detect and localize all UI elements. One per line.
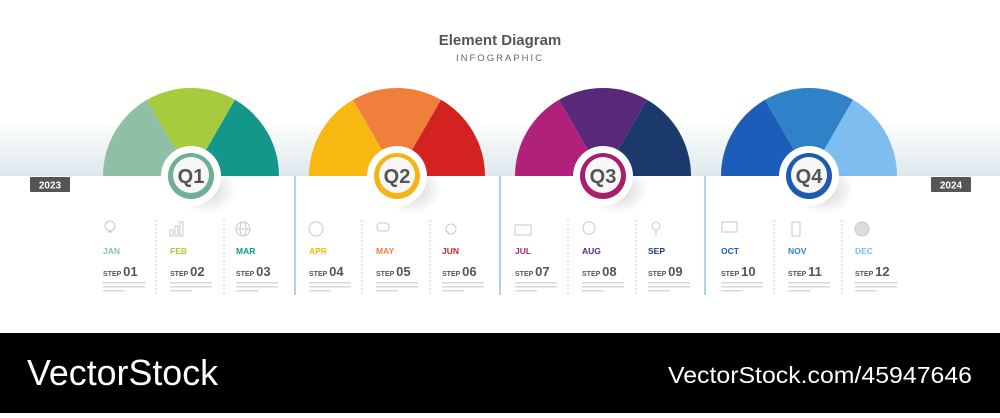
title: INFOGRAPHIC	[456, 53, 544, 64]
months: AUG	[582, 246, 601, 256]
badge Q3: Q3	[590, 166, 616, 188]
year 2024: 2024	[940, 180, 963, 192]
steps: STEP 06	[442, 264, 477, 279]
quarter dividers	[295, 176, 705, 295]
months: FEB	[170, 246, 187, 256]
steps: STEP 12	[855, 264, 890, 279]
steps: STEP 03	[236, 264, 271, 279]
footer bar	[0, 333, 1000, 413]
year 2023: 2023	[39, 180, 62, 192]
badge Q1	[161, 146, 236, 214]
months: MAY	[376, 246, 394, 256]
steps: STEP 01	[103, 264, 138, 279]
semicircle Q4	[721, 88, 897, 176]
semicircle Q2	[309, 88, 485, 176]
months: JUL	[515, 246, 531, 256]
months: DEC	[855, 246, 873, 256]
badge Q3	[573, 146, 648, 214]
steps: STEP 10	[721, 264, 756, 279]
steps: STEP 02	[170, 264, 205, 279]
title	[439, 32, 561, 64]
months: MAR	[236, 246, 255, 256]
footer bar: VectorStock.com/45947646	[668, 362, 972, 388]
months: JUN	[442, 246, 459, 256]
badge Q1: Q1	[178, 166, 204, 188]
steps: STEP 04	[309, 264, 344, 279]
year 2023	[30, 177, 70, 192]
footer bar: VectorStock	[27, 352, 219, 393]
steps: STEP 09	[648, 264, 683, 279]
steps: STEP 11	[788, 264, 822, 279]
badge Q4: Q4	[796, 166, 823, 188]
semicircle Q1	[103, 88, 279, 176]
background band	[0, 120, 1000, 176]
steps	[103, 264, 890, 279]
badge Q4	[779, 146, 854, 214]
badge Q2: Q2	[384, 166, 410, 188]
badge Q2	[367, 146, 442, 214]
year 2024	[931, 177, 971, 192]
months: JAN	[103, 246, 120, 256]
title: Element Diagram	[439, 32, 561, 49]
months: APR	[309, 246, 327, 256]
months: OCT	[721, 246, 740, 256]
months	[103, 246, 873, 256]
months: NOV	[788, 246, 807, 256]
icons row	[105, 221, 869, 236]
lorem text lines	[103, 282, 897, 292]
semicircle Q3	[515, 88, 691, 176]
lower white panel	[0, 176, 1000, 333]
steps: STEP 05	[376, 264, 411, 279]
months: SEP	[648, 246, 665, 256]
steps: STEP 08	[582, 264, 617, 279]
steps: STEP 07	[515, 264, 550, 279]
